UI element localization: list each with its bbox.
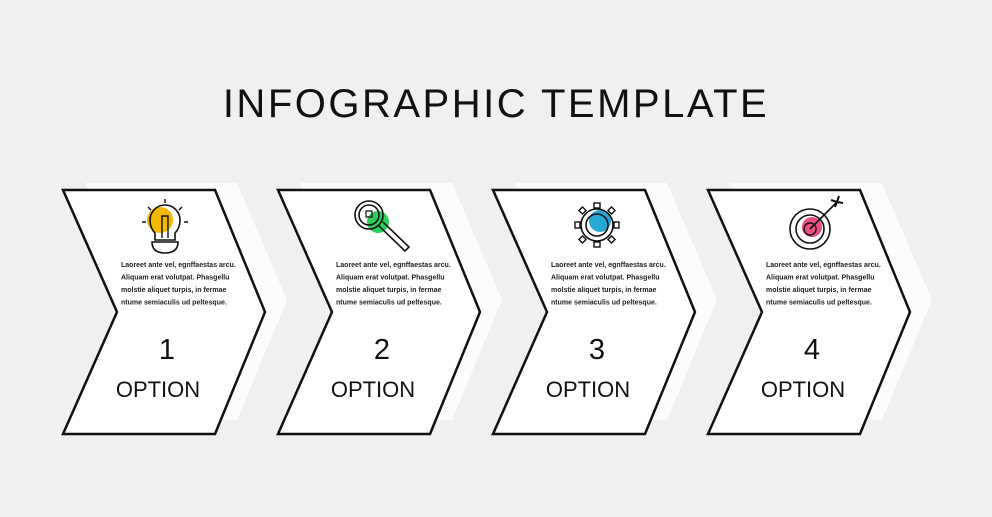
- text block: Laoreet ante vel, egnffaestas arcu.: [336, 262, 451, 269]
- icon: target: [790, 196, 843, 249]
- label: OPTION: [116, 377, 200, 402]
- text block: Aliquam erat volutpat. Phasgellu: [766, 274, 875, 282]
- icon: magnifier: [355, 201, 409, 251]
- text block: molstie aliquet turpis, in fermae: [766, 287, 872, 294]
- panel: option 1: [63, 183, 287, 434]
- text block: ntume semiaculis ud peltesque.: [551, 300, 657, 306]
- panel: option 2: [278, 183, 502, 434]
- text block: molstie aliquet turpis, in fermae: [336, 287, 442, 294]
- label: OPTION: [546, 377, 630, 402]
- number: 3: [589, 334, 605, 366]
- label: OPTION: [761, 377, 845, 402]
- label: OPTION: [331, 377, 415, 402]
- text block: ntume semiaculis ud peltesque.: [336, 300, 442, 306]
- text block: Laoreet ante vel, egnffaestas arcu.: [121, 262, 236, 269]
- text block: ntume semiaculis ud peltesque.: [121, 300, 227, 306]
- panel: option 3: [493, 183, 717, 434]
- text block: molstie aliquet turpis, in fermae: [551, 287, 657, 294]
- text block: Laoreet ante vel, egnffaestas arcu.: [551, 262, 666, 269]
- number: 4: [804, 334, 820, 366]
- text block: molstie aliquet turpis, in fermae: [121, 287, 227, 294]
- icon: light bulb: [142, 199, 188, 253]
- number: 2: [374, 334, 390, 366]
- text block: ntume semiaculis ud peltesque.: [766, 300, 872, 306]
- text block: Laoreet ante vel, egnffaestas arcu.: [766, 262, 881, 269]
- number: 1: [159, 334, 175, 366]
- title: INFOGRAPHIC TEMPLATE: [223, 82, 769, 126]
- text block: Aliquam erat volutpat. Phasgellu: [551, 274, 660, 282]
- text block: Aliquam erat volutpat. Phasgellu: [336, 274, 445, 282]
- panel: option 4: [708, 183, 932, 434]
- icon: gear: [575, 203, 619, 247]
- text block: Aliquam erat volutpat. Phasgellu: [121, 274, 230, 282]
